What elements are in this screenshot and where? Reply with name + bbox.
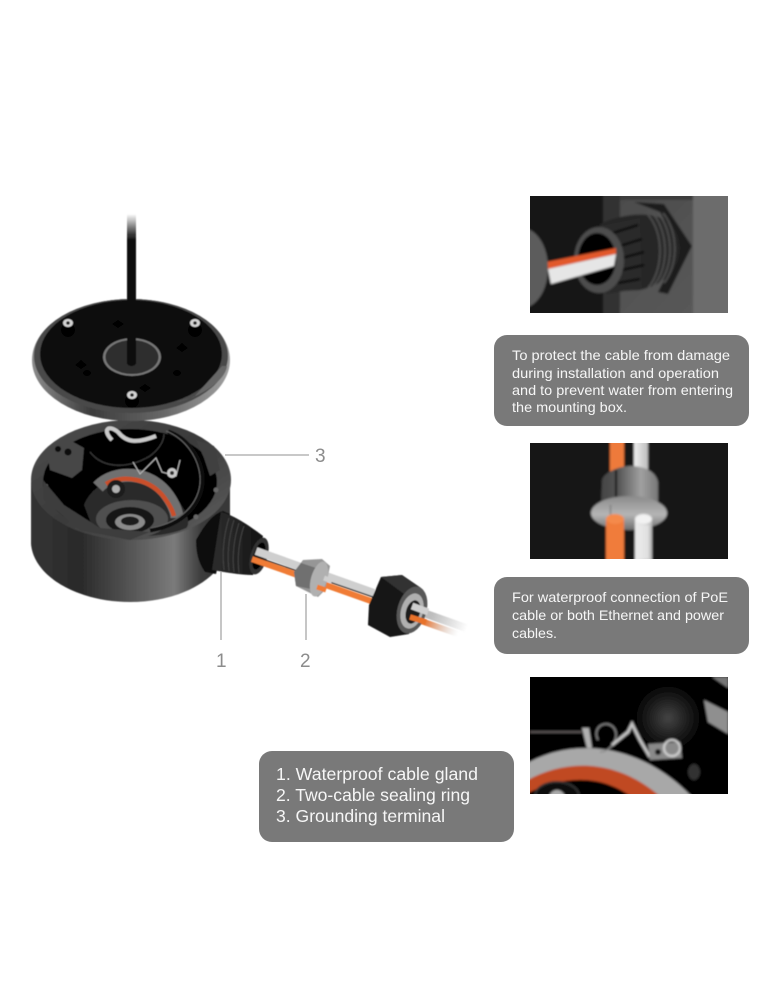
inset photo: cable gland [530,196,728,313]
text panel: waterproof connection [494,577,749,654]
cables between gland and nut [252,551,374,601]
cable gland on box [196,511,272,577]
text panel: legend: 2. Two-cable sealing ring [276,785,470,805]
text panel: protect cable: To protect the cable from damage [512,347,730,363]
sealing gasket [98,475,177,518]
lid plate [32,299,230,421]
sealing ring [294,559,332,599]
text panel: waterproof connection: cable or both Ethernet and power [512,607,724,623]
vertical cable [127,214,136,366]
callout line 1 [220,572,222,640]
callout number 1: 1 [216,651,227,672]
text panel: legend: 3. Grounding terminal [276,806,445,826]
callout number 2: 2 [300,651,311,672]
callout line 2 [305,594,307,640]
inset photo: sealing ring [530,443,728,559]
text panel: protect cable [494,335,749,426]
text panel: protect cable: during installation and operation [512,365,719,381]
text panel: protect cable: the mounting box. [512,399,627,415]
text panel: waterproof connection: cables. [512,625,557,641]
text panel: legend: 1. Waterproof cable gland [276,764,478,784]
internal wires [107,428,156,441]
internal black cable [150,432,202,530]
callout line 3 [225,454,309,456]
text panel: protect cable: and to prevent water from entering [512,382,733,398]
callout number 3: 3 [315,446,326,467]
pegs [61,323,75,337]
cables beyond nut [410,610,466,634]
mounting box base [31,420,231,602]
grounding terminal [133,458,180,476]
rim screws [214,488,218,492]
gland nut [368,575,433,637]
mounting holes [75,320,188,392]
text panel: legend [259,751,514,842]
text panel: waterproof connection: For waterproof connection of PoE [512,589,728,605]
product illustration: exploded mounting box [31,214,466,637]
center grommet [103,338,161,376]
inset photo: grounding terminal [530,677,728,794]
